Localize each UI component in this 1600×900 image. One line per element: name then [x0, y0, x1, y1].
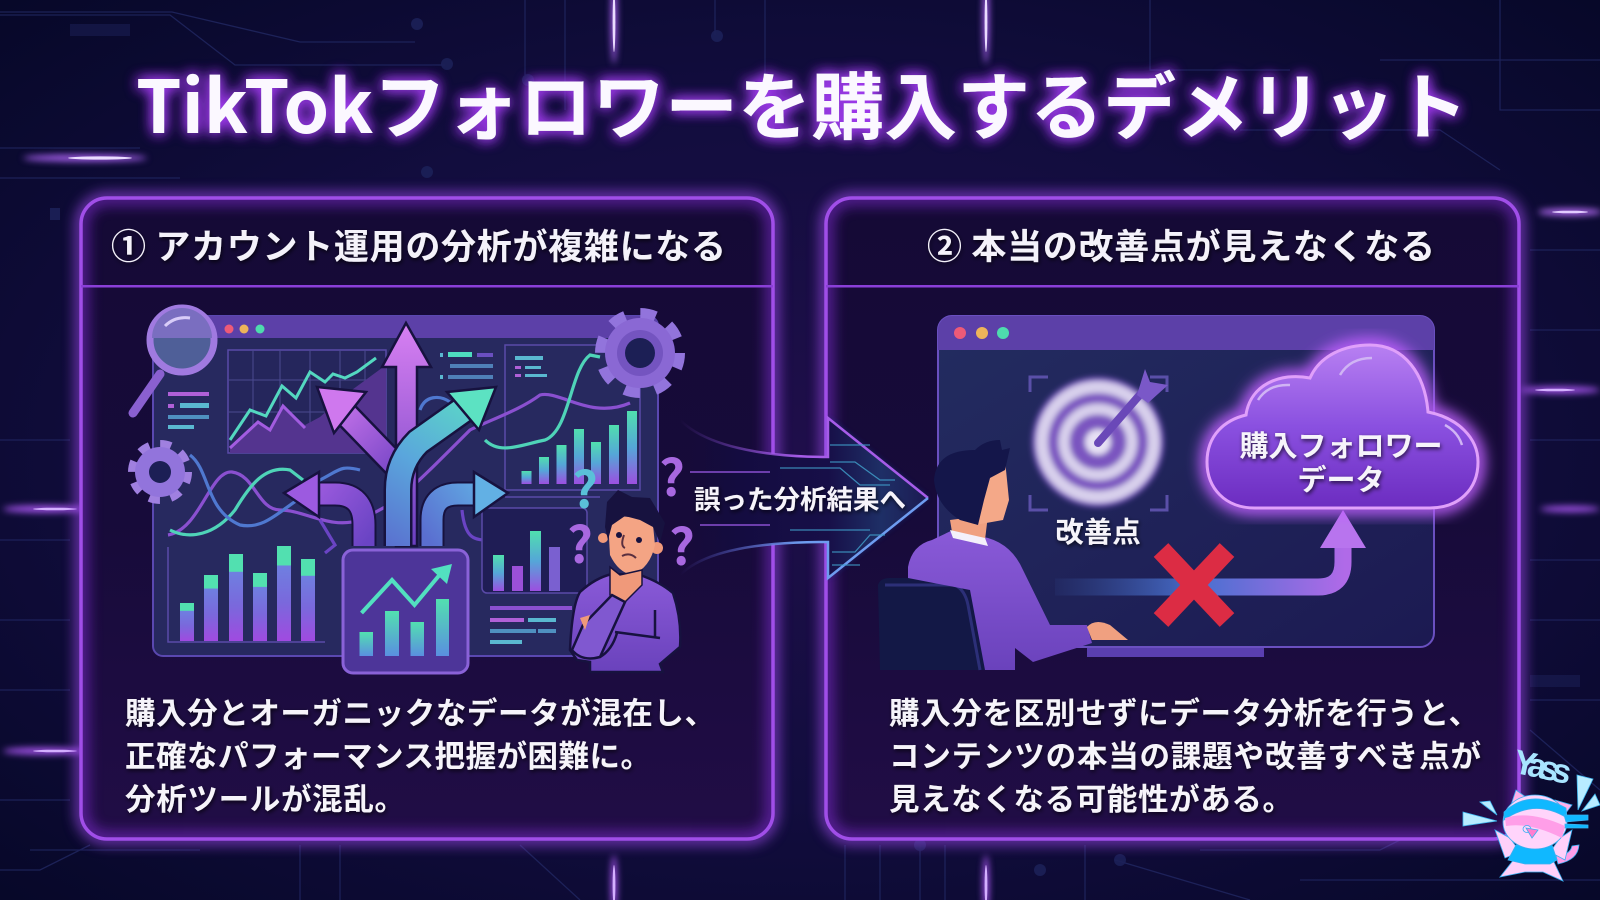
- icon: small gear: [133, 445, 187, 499]
- illustration: chaotic analytics dashboard: [133, 308, 695, 673]
- arrow: up: [382, 323, 431, 546]
- body text right: 購入分を区別せずにデータ分析を行うと、: [889, 689, 1479, 733]
- bar chart lower right: [482, 508, 587, 593]
- mascot: Yass cat: [1463, 743, 1600, 881]
- person thinking: [570, 490, 680, 672]
- dashboard window: [153, 316, 658, 656]
- monitor window: [938, 316, 1434, 657]
- text lines left: [168, 392, 209, 429]
- cloud: purchased follower data: [1207, 345, 1478, 508]
- panel: left, analysis becomes complex: [81, 198, 773, 839]
- chart tile centre: [343, 550, 468, 673]
- question marks: ?: [669, 508, 695, 580]
- text lines right: [440, 352, 547, 379]
- flow arrow to cloud: [1055, 510, 1366, 587]
- chair: [878, 578, 990, 670]
- mascot rays: [1463, 775, 1600, 826]
- body text left: 分析ツールが混乱。: [125, 775, 405, 819]
- line chart panel: [228, 350, 386, 453]
- blurred target: [1030, 369, 1168, 510]
- cloud: purchased follower data: データ: [1297, 457, 1385, 499]
- panel: right, real improvement points hidden: [826, 198, 1519, 839]
- person at monitor: [908, 440, 1128, 670]
- icon: large gear: [602, 315, 678, 391]
- body text left: 正確なパフォーマンス把握が困難に。: [125, 732, 651, 776]
- panel heading 1: ① アカウント運用の分析が複雑になる: [111, 219, 726, 270]
- body text left: [125, 689, 715, 819]
- bar chart lower left: [168, 546, 325, 642]
- cloud: purchased follower data: 購入フォロワー: [1239, 423, 1443, 465]
- question marks: ?: [567, 506, 593, 578]
- body text right: [889, 689, 1481, 819]
- mascot label: Yass: [1510, 743, 1575, 792]
- cat body: [1495, 790, 1588, 881]
- text lines lower right: [490, 606, 572, 644]
- arrow label: 誤った分析結果へ: [694, 478, 906, 517]
- question marks: ?: [572, 451, 598, 523]
- body text right: コンテンツの本当の課題や改善すべき点が: [889, 732, 1481, 776]
- body text right: 見えなくなる可能性がある。: [889, 775, 1293, 819]
- icon: magnifying glass: [133, 308, 214, 413]
- question marks: [567, 439, 695, 580]
- arrow: up-right large: [398, 387, 496, 546]
- question marks: ?: [659, 439, 685, 511]
- icon: red cross: [1161, 550, 1227, 620]
- arrow: right curved: [432, 472, 508, 546]
- label: improvement point: 改善点: [1055, 510, 1141, 551]
- panel heading 2: ② 本当の改善点が見えなくなる: [927, 219, 1435, 270]
- arrow: left curved: [284, 472, 364, 546]
- tangled trend lines: [168, 355, 630, 553]
- arrow: up-left: [317, 387, 398, 468]
- right sub-panels: [505, 345, 640, 490]
- arrow: wrong analysis result: [680, 418, 928, 578]
- body text left: 購入分とオーガニックなデータが混在し、: [125, 689, 715, 733]
- title: TikTokフォロワーを購入するデメリット: [136, 49, 1468, 155]
- bar chart upper right: [522, 411, 637, 484]
- illustration: monitor with target and cloud: [878, 316, 1478, 670]
